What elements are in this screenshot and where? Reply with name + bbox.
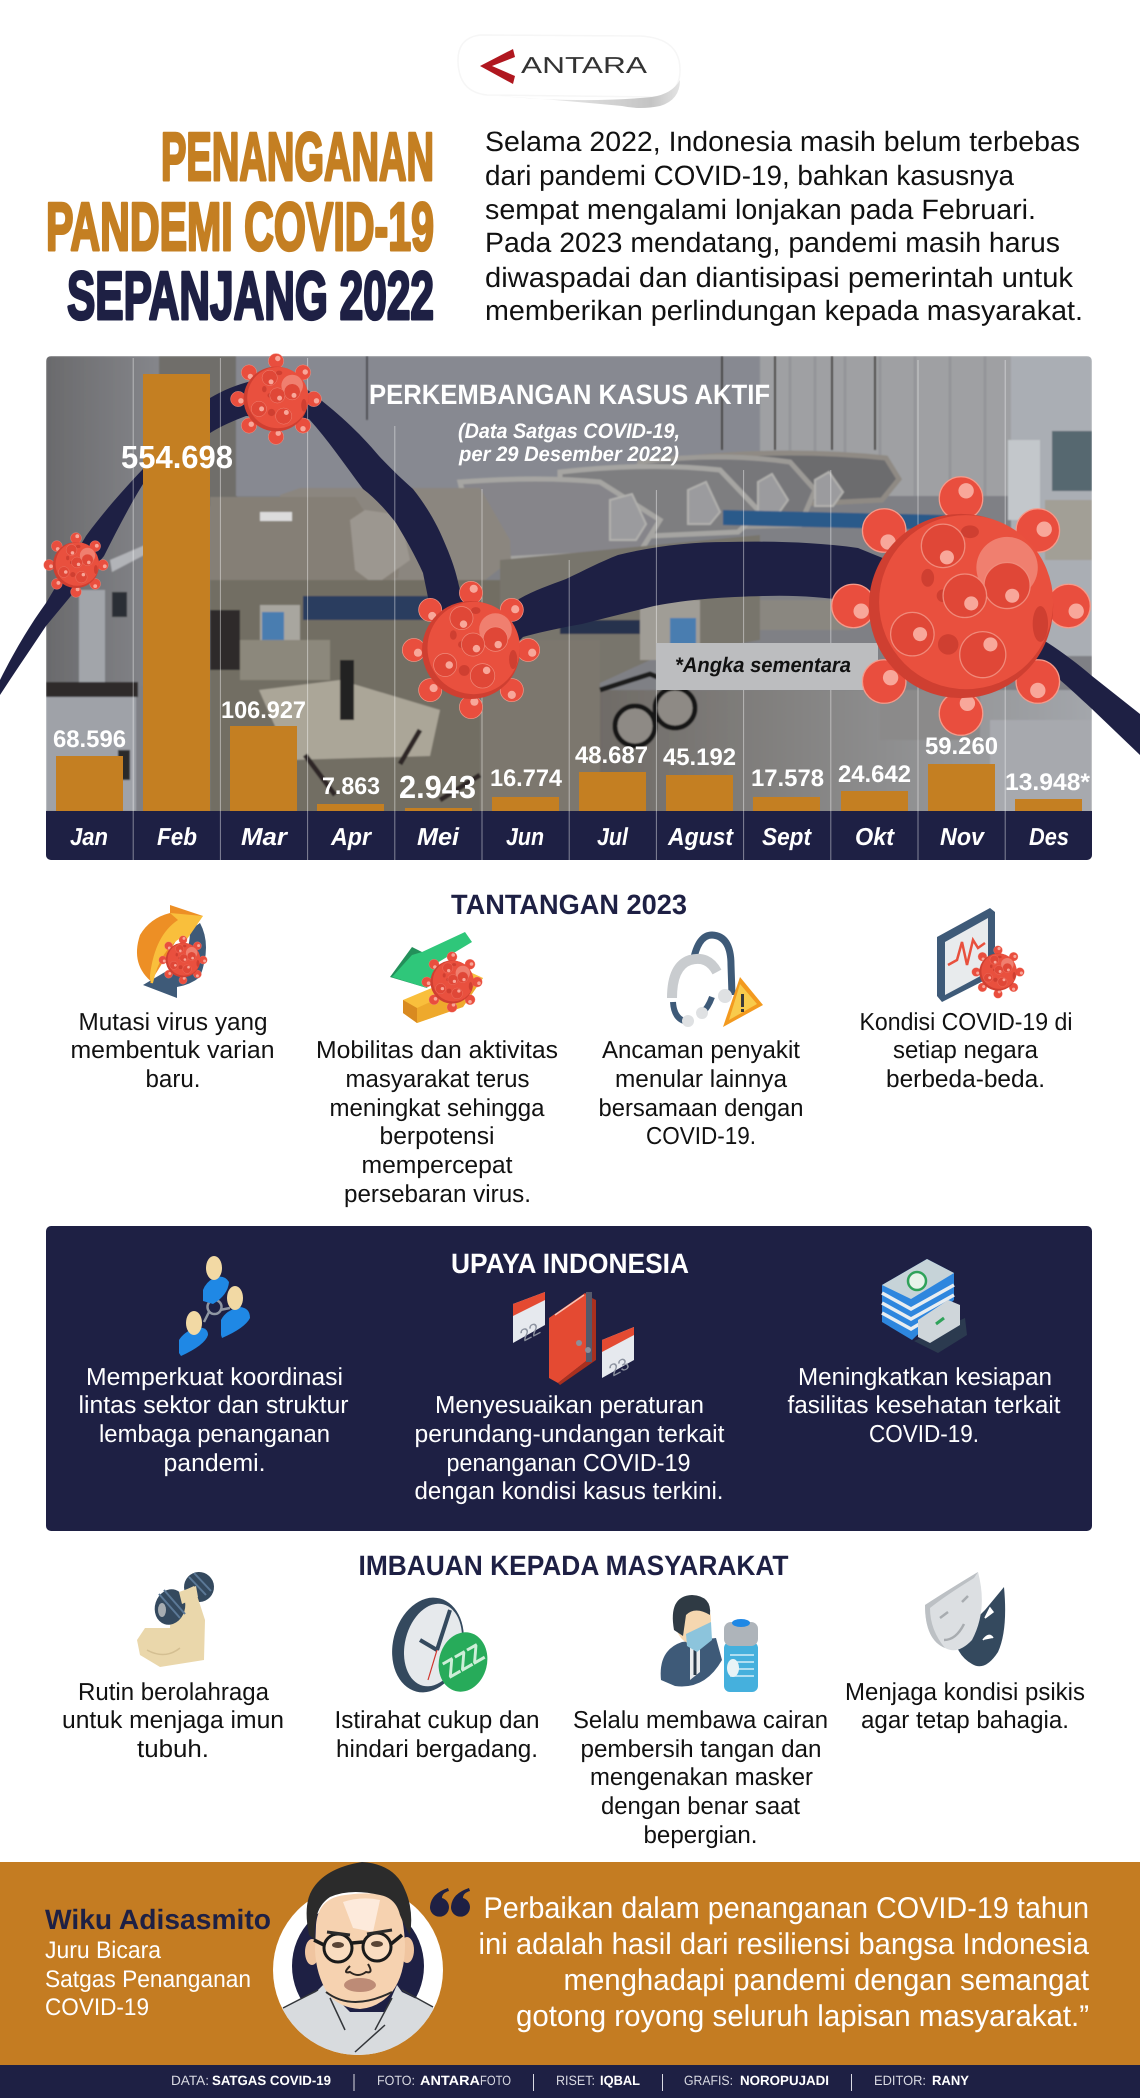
intro text block: Pada 2023 mendatang, pandemi masih harus (485, 227, 1060, 258)
icon: stethoscope and warning (672, 935, 763, 1027)
quote text (478, 1892, 1090, 2033)
bar values (53, 439, 1091, 805)
quote text: ini adalah hasil dari resiliensi bangsa Indonesia (478, 1928, 1089, 1961)
effort 2: dengan kondisi kasus terkini. (414, 1478, 724, 1505)
left equipment (79, 590, 105, 685)
chart title: PERKEMBANGAN KASUS AKTIF (369, 379, 770, 410)
challenge 2 (316, 932, 558, 1208)
footer credits bar: EDITOR: (874, 2073, 926, 2088)
icon: mutation arrows (137, 905, 207, 998)
effort 1: lintas sektor dan struktur (78, 1392, 348, 1419)
icon: coordinated people (179, 1256, 250, 1356)
provisional note: *Angka sementara (675, 654, 851, 677)
challenge 3: COVID-19. (646, 1123, 756, 1150)
challenge 3: bersamaan dengan (598, 1095, 804, 1122)
near headboards (280, 488, 511, 590)
spokesperson name and role (45, 1904, 271, 2021)
chart source note: (Data Satgas COVID-19, (458, 420, 680, 443)
icon: masked man and sanitizer (661, 1595, 758, 1692)
icon: theatre masks (925, 1572, 1005, 1666)
effort 3: Meningkatkan kesiapan (798, 1364, 1052, 1391)
effort 1: pandemi. (164, 1450, 266, 1477)
footer credits bar: NOROPUJADI (740, 2073, 829, 2088)
challenge 4: setiap negara (893, 1037, 1038, 1064)
intro text block: diwaspadai dan diantisipasi pemerintah untuk (485, 262, 1074, 293)
month labels: Feb (157, 824, 197, 851)
curve: case trend band (0, 378, 1140, 755)
month labels: Jun (506, 824, 544, 851)
footer credits bar: DATA: (171, 2073, 209, 2088)
challenge 4: Kondisi COVID-19 di (860, 1009, 1072, 1036)
advice 4: agar tetap bahagia. (861, 1707, 1069, 1734)
hospital ward photo background (46, 356, 1092, 860)
challenge 2: berpotensi (380, 1123, 494, 1150)
panel: active case chart (0, 354, 1140, 860)
heading: Imbauan kepada masyarakat: IMBAUAN KEPADA MASYARAKAT (358, 1550, 788, 1581)
footer credits bar: IQBAL (600, 2073, 640, 2088)
intro text block (485, 126, 1083, 326)
virus: Jan (44, 533, 108, 597)
month labels: Sept (762, 824, 812, 851)
challenge 2: masyarakat terus (346, 1066, 530, 1093)
spokesperson name and role: COVID-19 (45, 1994, 149, 2021)
intro text block: dari pandemi COVID-19, bahkan kasusnya (485, 160, 1014, 191)
bar values: 13.948* (1005, 769, 1091, 796)
challenge 4 (860, 908, 1072, 1093)
advice 4 (845, 1572, 1085, 1734)
advice 3: Selalu membawa cairan (573, 1707, 828, 1734)
spokesperson name and role: Wiku Adisasmito (45, 1904, 271, 1935)
panel: spokesperson quote (0, 1862, 1140, 2065)
panel: Upaya Indonesia (46, 1226, 1092, 1531)
effort 1: Memperkuat koordinasi (86, 1364, 343, 1391)
icon: hospital building (882, 1259, 967, 1353)
footer credits bar: SATGAS COVID-19 (212, 2073, 331, 2088)
bar values: 554.698 (121, 439, 233, 475)
intro text block: Selama 2022, Indonesia masih belum terbebas (485, 126, 1080, 157)
bar values: 16.774 (490, 765, 563, 792)
effort 2: perundang-undangan terkait (414, 1421, 725, 1448)
advice 2 (334, 1590, 540, 1763)
month labels: Des (1029, 824, 1069, 851)
bed frames (210, 580, 500, 814)
advice 1: tubuh. (137, 1736, 209, 1763)
challenge 3 (598, 935, 804, 1150)
intro text block: sempat mengalami lonjakan pada Februari. (485, 194, 1036, 225)
title (46, 119, 434, 334)
virus: Mei (402, 581, 540, 719)
spokesperson name and role: Juru Bicara (45, 1937, 162, 1964)
spokesperson name and role: Satgas Penanganan (45, 1966, 251, 1993)
footer credits bar: ANTARA (420, 2073, 480, 2088)
challenge 1: Mutasi virus yang (78, 1009, 268, 1036)
advice 3: pembersih tangan dan (580, 1736, 822, 1763)
footer credits bar (0, 2065, 1140, 2098)
chart source note (458, 420, 680, 466)
wheels (615, 706, 655, 746)
effort 3: fasilitas kesehatan terkait (788, 1392, 1061, 1419)
month labels: Mei (417, 824, 460, 851)
icon: mobility arrows (390, 932, 483, 1023)
advice 2: hindari bergadang. (336, 1736, 538, 1763)
icon: law book and calendars: 22 (517, 1319, 543, 1345)
month labels: Agust (667, 824, 734, 851)
title: PENANGANAN (161, 119, 434, 195)
advice 1: Rutin berolahraga (78, 1679, 269, 1706)
effort 2: Menyesuaikan peraturan (435, 1392, 704, 1419)
virus: Mar (231, 354, 321, 444)
bar values: 45.192 (663, 744, 736, 771)
icon: clock and sleep badge: ZZZ (438, 1637, 489, 1684)
bar values: 2.943 (399, 769, 476, 805)
advice 3: bepergian. (644, 1822, 758, 1849)
icon: law book and calendars: 23 (606, 1354, 632, 1380)
logo: ANTARA: ANTARA (521, 52, 648, 78)
effort 1 (78, 1256, 348, 1477)
heading: Tantangan 2023: TANTANGAN 2023 (451, 889, 687, 920)
challenge 4: berbeda-beda. (886, 1066, 1045, 1093)
month labels: Jan (70, 824, 108, 851)
challenge 2: Mobilitas dan aktivitas (316, 1037, 558, 1064)
bar values: 17.578 (751, 765, 824, 792)
month labels: Nov (940, 824, 985, 851)
footer credits bar: GRAFIS: (684, 2073, 733, 2088)
month labels (70, 824, 1069, 851)
month labels: Apr (330, 824, 372, 851)
effort 1: lembaga penanganan (99, 1421, 330, 1448)
quote text: gotong royong seluruh lapisan masyarakat.” (516, 2000, 1089, 2033)
bar values: 59.260 (925, 733, 998, 760)
footer credits bar: FOTO (480, 2073, 511, 2088)
portrait (270, 1862, 445, 2060)
intro text block: memberikan perlindungan kepada masyarakat. (485, 295, 1083, 326)
quote text: menghadapi pandemi dengan semangat (564, 1964, 1090, 1997)
challenge 1: membentuk varian (70, 1037, 274, 1064)
bar values: 68.596 (53, 726, 126, 753)
challenge 3: menular lainnya (615, 1066, 787, 1093)
challenge 1: baru. (146, 1066, 200, 1093)
month column grid lines (133, 358, 1005, 860)
footer credits bar: RANY (932, 2073, 969, 2088)
advice 1: untuk menjaga imun (62, 1707, 284, 1734)
bar values: 106.927 (221, 697, 306, 724)
month labels: Jul (597, 824, 629, 851)
icon: law book and calendars (513, 1292, 634, 1385)
bars (56, 374, 1082, 811)
icon: monitor with virus (937, 908, 1024, 1002)
bar values: 24.642 (838, 761, 911, 788)
icon: arm with dumbbell (137, 1568, 218, 1667)
advice 4: Menjaga kondisi psikis (845, 1679, 1085, 1706)
advice 1 (62, 1568, 284, 1763)
heading: Upaya Indonesia: UPAYA INDONESIA (451, 1248, 689, 1279)
advice 3 (573, 1595, 828, 1849)
title: SEPANJANG 2022 (67, 258, 434, 334)
icon: quotation mark (430, 1888, 470, 1917)
effort 3 (788, 1259, 1061, 1448)
month labels: Okt (855, 824, 895, 851)
quote text: Perbaikan dalam penanganan COVID-19 tahun (484, 1892, 1089, 1925)
footer credits bar: FOTO: (377, 2073, 415, 2088)
advice 3: dengan benar saat (601, 1793, 800, 1820)
challenge 2: persebaran virus. (344, 1181, 531, 1208)
challenge 3: Ancaman penyakit (602, 1037, 800, 1064)
logo: ANTARA (458, 35, 680, 108)
advice 3: mengenakan masker (590, 1764, 813, 1791)
title: PANDEMI COVID-19 (46, 189, 434, 265)
virus: Nov large (832, 477, 1090, 735)
month axis band (46, 811, 1092, 860)
effort 3: COVID-19. (869, 1421, 979, 1448)
far headboards (717, 450, 902, 506)
advice 2: Istirahat cukup dan (334, 1707, 540, 1734)
chart source note: per 29 Desember 2022) (458, 443, 679, 466)
icon: clock and sleep badge (382, 1590, 494, 1700)
provisional note (656, 643, 878, 690)
effort 2 (414, 1292, 725, 1505)
month separators (133, 811, 1005, 860)
challenge 2: mempercepat (362, 1152, 513, 1179)
effort 2: penanganan COVID-19 (446, 1450, 690, 1477)
bar values: 7.863 (322, 773, 380, 800)
month labels: Mar (241, 824, 289, 851)
footer credits bar: RISET: (556, 2073, 595, 2088)
bar values: 48.687 (575, 742, 648, 769)
challenge 1 (70, 905, 274, 1093)
challenge 2: meningkat sehingga (330, 1095, 545, 1122)
